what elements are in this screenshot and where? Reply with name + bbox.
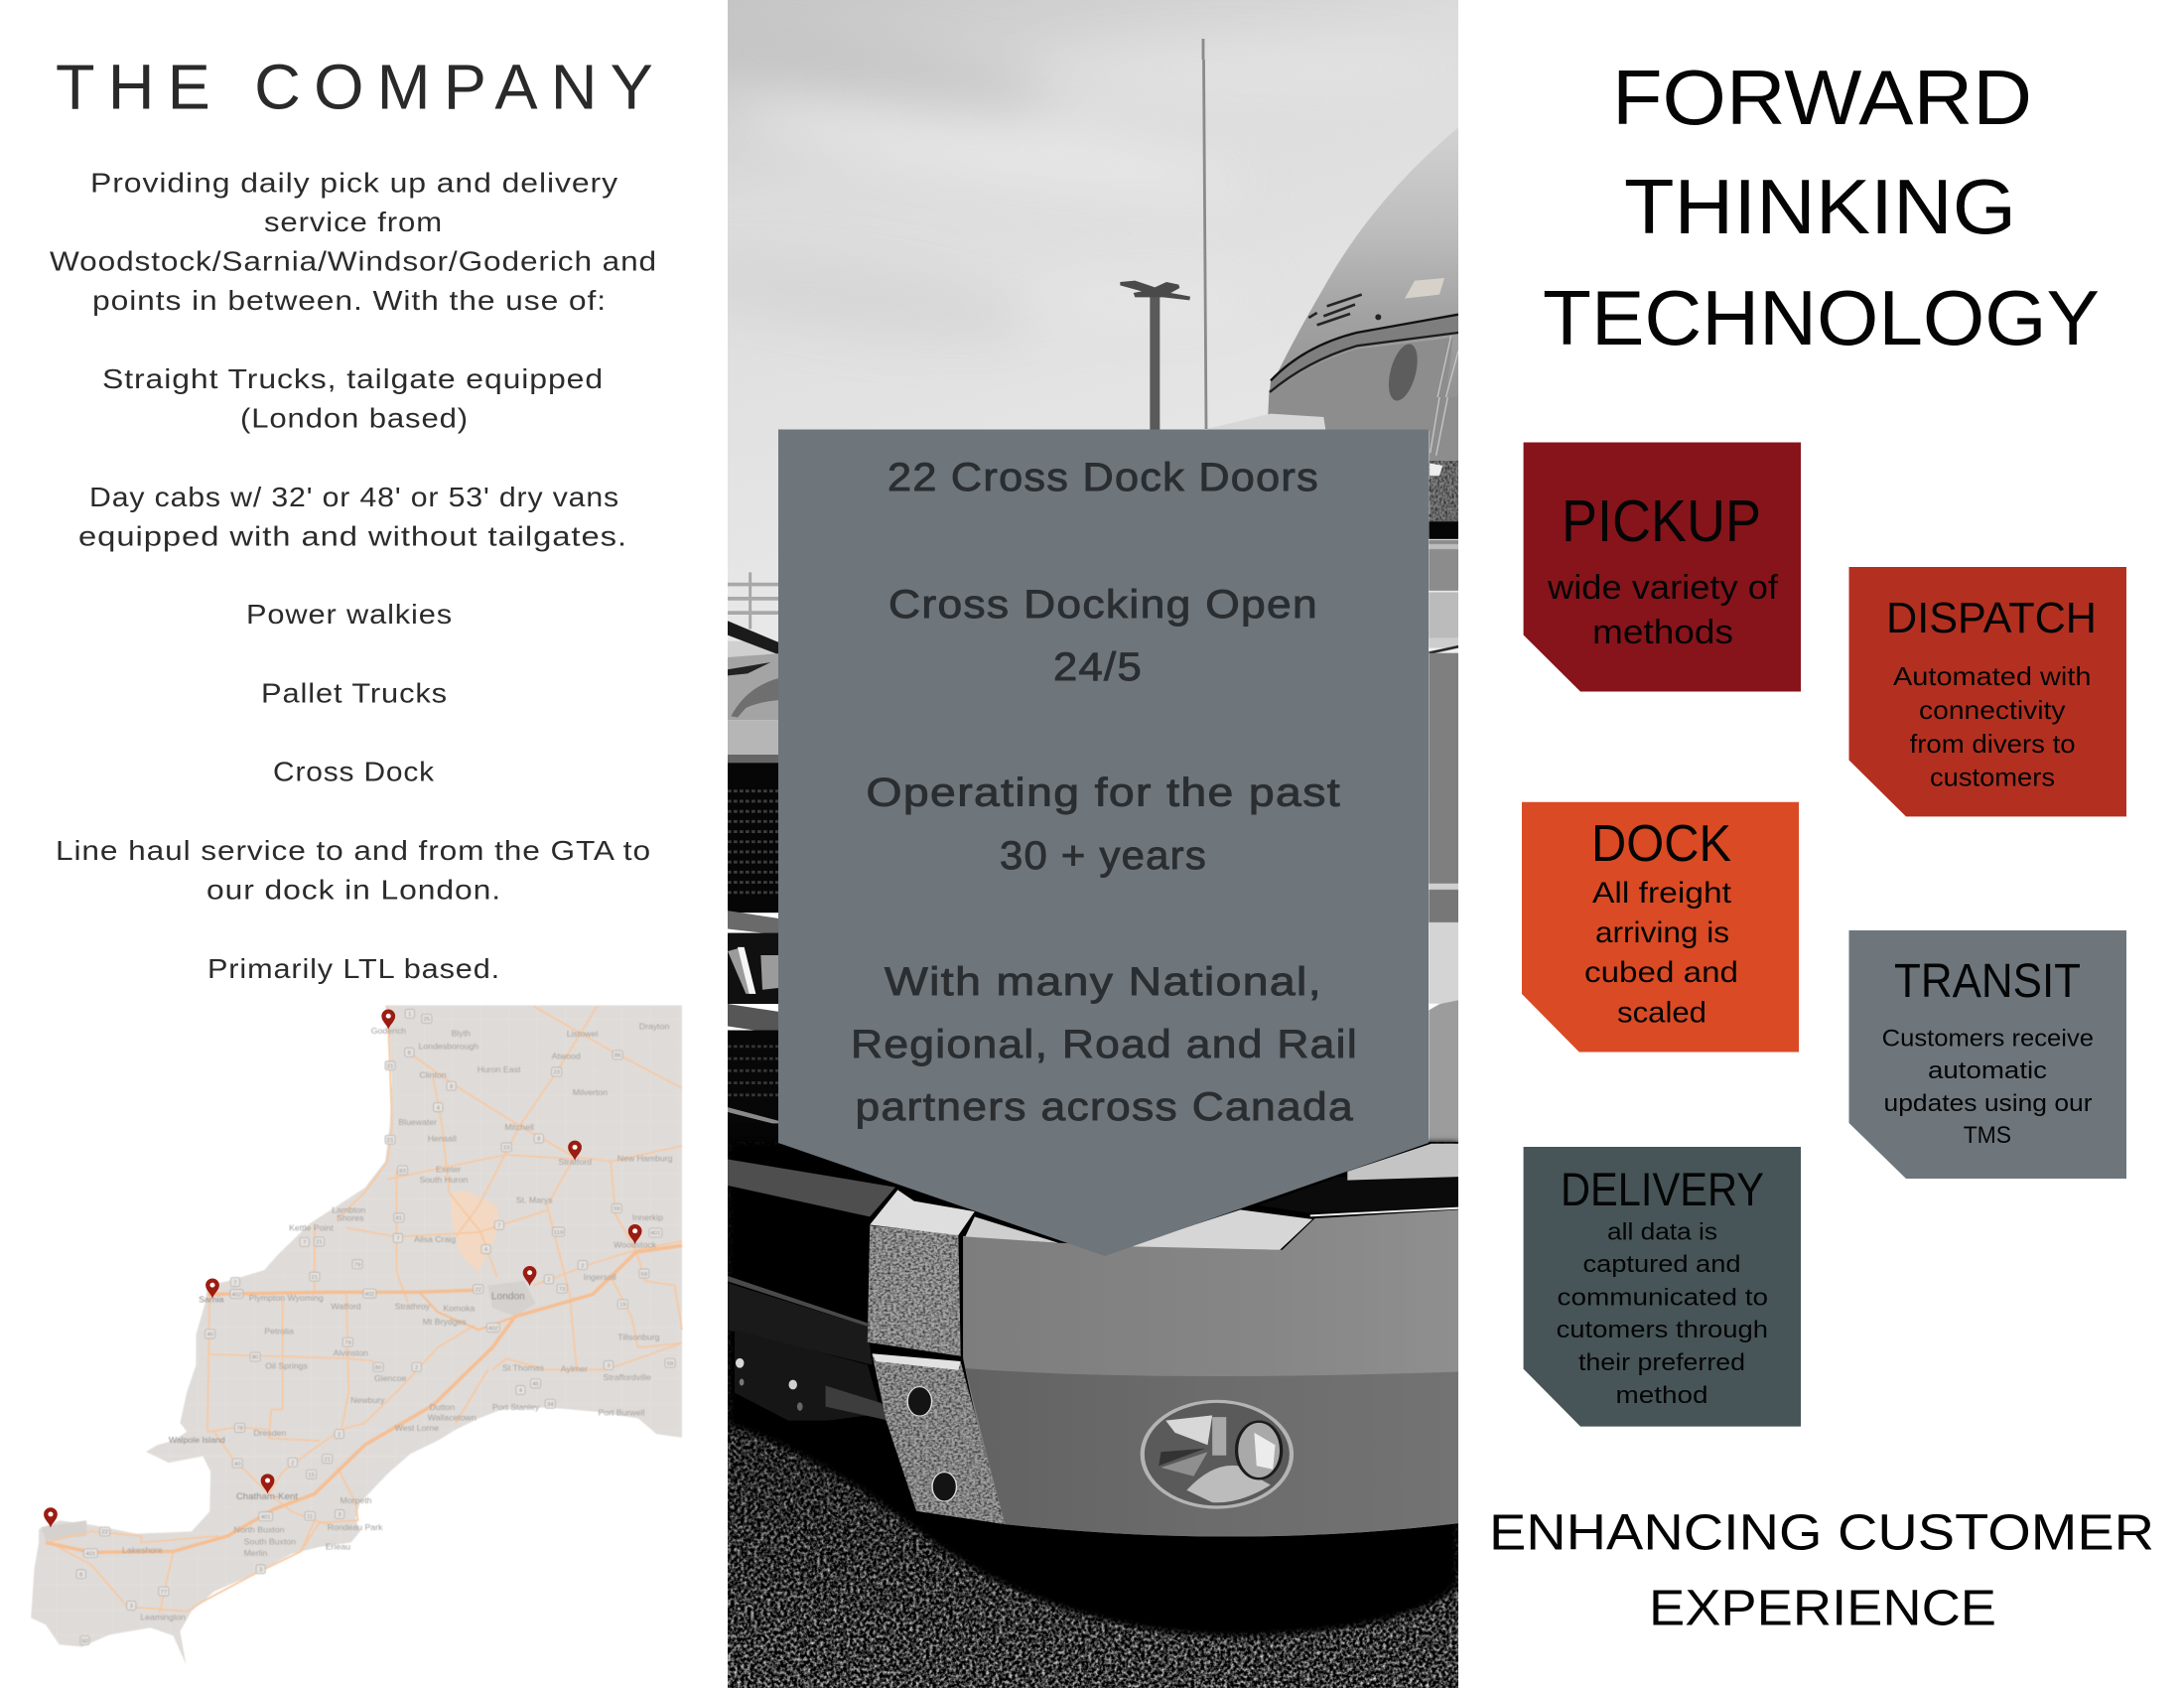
- text block: company description: Woodstock/Sarnia/Windsor/Goderich and: [50, 246, 657, 276]
- text block: company description: Line haul service to and from the GTA to: [56, 835, 651, 866]
- map: southwestern Ontario: 19: [619, 1303, 626, 1309]
- map: southwestern Ontario: Ailsa Craig: [414, 1234, 456, 1244]
- map: southwestern Ontario: 50: [81, 1638, 88, 1644]
- shadow under bumper: [728, 1142, 1458, 1636]
- text block: company description: Straight Trucks, tailgate equipped: [102, 363, 604, 394]
- map: southwestern Ontario: Oil Springs: [265, 1361, 308, 1371]
- card: dispatch: connectivity: [1919, 695, 2065, 725]
- text block: company description: Providing daily pick up and delivery: [90, 167, 618, 199]
- map: southwestern Ontario: Port Stanley: [492, 1402, 540, 1412]
- callout text: With many National,: [885, 960, 1322, 1004]
- map: southwestern Ontario: [28, 1002, 684, 1667]
- card: dock: cubed and: [1584, 956, 1738, 989]
- map: southwestern Ontario: 21: [316, 1240, 323, 1246]
- callout text: Regional, Road and Rail: [851, 1023, 1358, 1066]
- map: southwestern Ontario: Woodstock: [614, 1240, 657, 1250]
- heading: enhancing customer experience: EXPERIENCE: [1649, 1579, 1996, 1636]
- map: southwestern Ontario: 79: [354, 1262, 360, 1268]
- map location pins: [44, 1010, 642, 1527]
- map: southwestern Ontario: Goderich: [371, 1026, 406, 1036]
- map: southwestern Ontario: 7: [233, 1280, 237, 1286]
- heading: enhancing customer experience: ENHANCING CUSTOMER: [1489, 1503, 2154, 1561]
- map: southwestern Ontario: 7: [497, 1223, 500, 1229]
- map: southwestern Ontario: Drayton: [639, 1022, 670, 1032]
- map: southwestern Ontario: 23: [503, 1146, 510, 1152]
- card: transit: automatic: [1928, 1057, 2047, 1084]
- map: southwestern Ontario: Mitchell: [504, 1122, 534, 1132]
- callout text: 24/5: [1053, 645, 1143, 689]
- card: dispatch: customers: [1930, 763, 2055, 792]
- map: southwestern Ontario: Shores: [337, 1213, 364, 1222]
- map: southwestern Ontario: Glencoe: [374, 1373, 407, 1383]
- card: transit: updates using our: [1884, 1090, 2093, 1117]
- map: southwestern Ontario: 4: [437, 1105, 441, 1111]
- panel: forward thinking technology: [1489, 54, 2154, 1636]
- card: dispatch: Automated with: [1893, 661, 2091, 691]
- map: southwestern Ontario: 45: [532, 1382, 540, 1387]
- map: southwestern Ontario: 59: [614, 1206, 620, 1212]
- map: southwestern Ontario: 8: [537, 1137, 541, 1143]
- callout text: 30 + years: [1000, 834, 1207, 878]
- map: southwestern Ontario: 83: [399, 1169, 407, 1175]
- card: delivery: DELIVERY: [1561, 1163, 1764, 1215]
- map: southwestern Ontario: Ingersoll: [584, 1272, 616, 1282]
- map: southwestern Ontario: 73: [559, 1287, 566, 1293]
- map: southwestern Ontario: South Huron: [419, 1175, 469, 1185]
- asphalt ground: [728, 1142, 1458, 1688]
- card: dispatch: from divers to: [1910, 729, 2076, 759]
- callout text: partners across Canada: [856, 1085, 1354, 1129]
- antenna: [1203, 39, 1206, 429]
- map: southwestern Ontario: New Hamburg: [617, 1154, 673, 1164]
- map: southwestern Ontario: Merlin: [244, 1548, 268, 1558]
- map: southwestern Ontario: 11: [307, 1514, 313, 1520]
- map: southwestern Ontario: 80: [252, 1355, 259, 1361]
- map: southwestern Ontario: Wallacetown: [428, 1412, 477, 1422]
- card: delivery: their preferred: [1578, 1349, 1745, 1376]
- clouds: [812, 60, 983, 320]
- map: southwestern Ontario: 59: [641, 1272, 647, 1278]
- map: southwestern Ontario: 77: [161, 1590, 167, 1596]
- map: southwestern Ontario: 401: [650, 1231, 660, 1237]
- map: southwestern Ontario: Kettle Point: [289, 1223, 334, 1233]
- card: dock: [1522, 802, 1799, 1053]
- map: southwestern Ontario: 15: [308, 1473, 316, 1478]
- text block: company description: our dock in London.: [206, 874, 501, 906]
- map: southwestern Ontario: 8: [450, 1084, 454, 1090]
- map: southwestern Ontario: Port Burwell: [598, 1408, 645, 1417]
- callout text: Cross Docking Open: [888, 583, 1318, 627]
- heading: the company: THE COMPANY: [56, 52, 666, 123]
- map: southwestern Ontario: Huron East: [478, 1064, 521, 1074]
- card: transit: TMS: [1964, 1122, 2011, 1149]
- map: southwestern Ontario: 21: [312, 1275, 318, 1281]
- map: southwestern Ontario: 7: [396, 1236, 400, 1242]
- callout text: Operating for the past: [866, 771, 1341, 814]
- card: pickup: PICKUP: [1562, 489, 1761, 554]
- map: southwestern Ontario: Alvinston: [334, 1348, 368, 1358]
- fog lamp: [1143, 1401, 1292, 1507]
- card: delivery: all data is: [1607, 1219, 1717, 1246]
- truck cab roof: [1208, 127, 1458, 434]
- heading: forward thinking technology: [1543, 54, 2100, 361]
- map: southwestern Ontario: Newbury: [350, 1395, 385, 1405]
- card: transit: TRANSIT: [1894, 955, 2081, 1008]
- text block: company description: [50, 167, 657, 984]
- card: delivery: captured and: [1582, 1251, 1741, 1278]
- map: southwestern Ontario: 402: [488, 1326, 498, 1332]
- text block: company description: Day cabs w/ 32' or 48' or 53' dry vans: [89, 482, 619, 512]
- text block: company description: (London based): [240, 403, 469, 433]
- left side strip: scaffold, mirror and grille: [728, 572, 778, 1142]
- map: southwestern Ontario: Watford: [331, 1302, 361, 1312]
- map: southwestern Ontario: Strathroy: [395, 1302, 431, 1312]
- map: southwestern Ontario: 22: [101, 1530, 108, 1536]
- map: southwestern Ontario: Erieau: [326, 1542, 350, 1552]
- card: dock: DOCK: [1591, 815, 1731, 873]
- map: southwestern Ontario: 7: [303, 1240, 306, 1246]
- card: delivery: cutomers through: [1557, 1317, 1768, 1343]
- upper photo details: [1120, 127, 1458, 434]
- map: southwestern Ontario: Dresden: [253, 1428, 286, 1438]
- text block: company description: Cross Dock: [273, 757, 435, 786]
- card: delivery: method: [1616, 1382, 1707, 1409]
- map: southwestern Ontario: 2: [291, 1461, 294, 1467]
- map: southwestern Ontario: Clinton: [419, 1070, 447, 1080]
- text block: company description: Pallet Trucks: [261, 677, 448, 709]
- map: southwestern Ontario: 3: [607, 1363, 611, 1369]
- heading: enhancing customer experience: [1489, 1503, 2154, 1636]
- map: southwestern Ontario: Lambton: [332, 1205, 365, 1214]
- map: southwestern Ontario: 402: [364, 1292, 374, 1298]
- map: southwestern Ontario: Sarnia: [199, 1295, 224, 1305]
- map: southwestern Ontario: 3: [338, 1512, 341, 1518]
- map: southwestern Ontario: Leamington: [140, 1613, 186, 1622]
- card: pickup: methods: [1592, 614, 1733, 651]
- card: dock: scaled: [1617, 996, 1706, 1029]
- map: southwestern Ontario: Dutton: [430, 1402, 455, 1412]
- map: southwestern Ontario: 8: [408, 1051, 412, 1056]
- map: southwestern Ontario: Tillsonburg: [617, 1333, 660, 1342]
- map: southwestern Ontario: 2: [581, 1263, 585, 1269]
- map: southwestern Ontario: Petrolia: [264, 1327, 294, 1336]
- card: transit: Customers receive: [1882, 1026, 2094, 1053]
- card: transit: [1848, 930, 2126, 1179]
- map: southwestern Ontario: St. Marys: [516, 1196, 553, 1205]
- heading: forward thinking technology: THINKING: [1624, 163, 2016, 250]
- map: southwestern Ontario: 3: [259, 1568, 263, 1574]
- map: southwestern Ontario: 1: [408, 1012, 411, 1018]
- text block: company description: equipped with and without tailgates.: [78, 520, 627, 552]
- map: southwestern Ontario: 22: [475, 1287, 481, 1293]
- card: dock: arriving is: [1595, 916, 1729, 949]
- map: southwestern Ontario: 81: [395, 1216, 402, 1222]
- map: southwestern Ontario: 86: [614, 1054, 621, 1059]
- map: southwestern Ontario: 3: [130, 1604, 134, 1610]
- bumper body: [963, 1144, 1458, 1537]
- lower photo details: [728, 1142, 1458, 1636]
- map: southwestern Ontario: West Lorne: [395, 1423, 439, 1433]
- map: southwestern Ontario: Aylmer: [561, 1364, 588, 1374]
- text block: company description: service from: [264, 207, 443, 237]
- map: southwestern Ontario: 2: [338, 1432, 341, 1438]
- map: southwestern Ontario: 401: [85, 1552, 95, 1557]
- sky background: [728, 0, 1458, 794]
- heading: forward thinking technology: TECHNOLOGY: [1543, 274, 2100, 361]
- map: southwestern Ontario: 2: [415, 1365, 418, 1371]
- card: dock: All freight: [1592, 877, 1732, 910]
- map: southwestern Ontario: Bluewater: [398, 1117, 437, 1127]
- map: southwestern Ontario: South Buxton: [244, 1536, 296, 1546]
- map: southwestern Ontario: Blyth: [452, 1028, 471, 1038]
- map: southwestern Ontario: Listowel: [567, 1029, 598, 1039]
- right side strip: truck body: [1429, 397, 1459, 1183]
- map: southwestern Ontario: Chatham-Kent: [236, 1491, 298, 1502]
- text block: company description: points in between. With the use of:: [92, 285, 607, 316]
- map: southwestern Ontario: Londesborough: [419, 1042, 478, 1052]
- map: southwestern Ontario: Stratford: [559, 1157, 592, 1167]
- callout text: 22 Cross Dock Doors: [887, 456, 1319, 499]
- map: southwestern Ontario: 25: [423, 1017, 431, 1023]
- map: southwestern Ontario: Lakeshore: [122, 1545, 163, 1555]
- card: delivery: communicated to: [1557, 1285, 1768, 1312]
- map: southwestern Ontario: 23: [553, 1070, 561, 1076]
- map: southwestern Ontario: Exeter: [436, 1164, 461, 1174]
- map: southwestern Ontario: London: [491, 1292, 525, 1302]
- map: southwestern Ontario: 34: [547, 1402, 554, 1408]
- callout text: [851, 456, 1358, 1129]
- card: dispatch: [1848, 567, 2126, 816]
- card: delivery: [1524, 1147, 1801, 1427]
- heading: forward thinking technology: FORWARD: [1612, 54, 2032, 141]
- lamp post: [1120, 281, 1190, 434]
- map: southwestern Ontario: 4: [484, 1247, 488, 1253]
- map: southwestern Ontario: 8: [79, 1573, 83, 1578]
- callout: cross dock facts: [778, 429, 1429, 1256]
- map: southwestern Ontario: Hensall: [428, 1134, 457, 1144]
- map: southwestern Ontario: 40: [206, 1333, 214, 1337]
- map: southwestern Ontario: 402: [231, 1292, 241, 1298]
- map: southwestern Ontario: Walpole Island: [169, 1435, 225, 1445]
- card: pickup: [1524, 443, 1801, 691]
- map: southwestern Ontario: North Buxton: [234, 1525, 285, 1535]
- map: southwestern Ontario: Mt Brydges: [423, 1317, 467, 1327]
- map: southwestern Ontario: Straffordville: [604, 1372, 651, 1382]
- card: pickup: wide variety of: [1547, 569, 1779, 607]
- map: southwestern Ontario: 79: [344, 1340, 351, 1346]
- map: southwestern Ontario: Atwood: [552, 1052, 581, 1060]
- map: southwestern Ontario: Rondeau Park: [328, 1522, 383, 1532]
- map: southwestern Ontario: Morpeth: [341, 1495, 372, 1505]
- text block: company description: Primarily LTL based.: [207, 953, 500, 984]
- map: southwestern Ontario: Milverton: [573, 1087, 608, 1097]
- chrome bumper corner: [868, 1190, 1005, 1524]
- bumper dark bands: [728, 1160, 895, 1421]
- map: southwestern Ontario: Komoka: [443, 1304, 476, 1313]
- map: southwestern Ontario: 401: [261, 1514, 271, 1520]
- map: southwestern Ontario: 4: [519, 1388, 523, 1394]
- map: southwestern Ontario: 21: [387, 1063, 393, 1069]
- map: southwestern Ontario: 2: [547, 1278, 551, 1284]
- map: southwestern Ontario: Innerkip: [632, 1212, 663, 1222]
- panel: truck photo: [653, 0, 1469, 1688]
- card: dispatch: DISPATCH: [1886, 594, 2097, 642]
- map: southwestern Ontario: St Thomas: [502, 1362, 544, 1372]
- panel: the company: [28, 52, 684, 1667]
- map: southwestern Ontario: 21: [387, 1138, 393, 1144]
- map: southwestern Ontario: 21: [324, 1457, 331, 1463]
- map: southwestern Ontario: 119: [554, 1230, 563, 1236]
- text block: company description: Power walkies: [246, 599, 453, 630]
- map: southwestern Ontario: Plympton Wyoming: [249, 1293, 324, 1303]
- map: southwestern Ontario: 59: [667, 1361, 673, 1367]
- map: southwestern Ontario: 40: [234, 1462, 241, 1468]
- map: southwestern Ontario: 80: [375, 1365, 382, 1371]
- map: southwestern Ontario: 78: [236, 1426, 244, 1432]
